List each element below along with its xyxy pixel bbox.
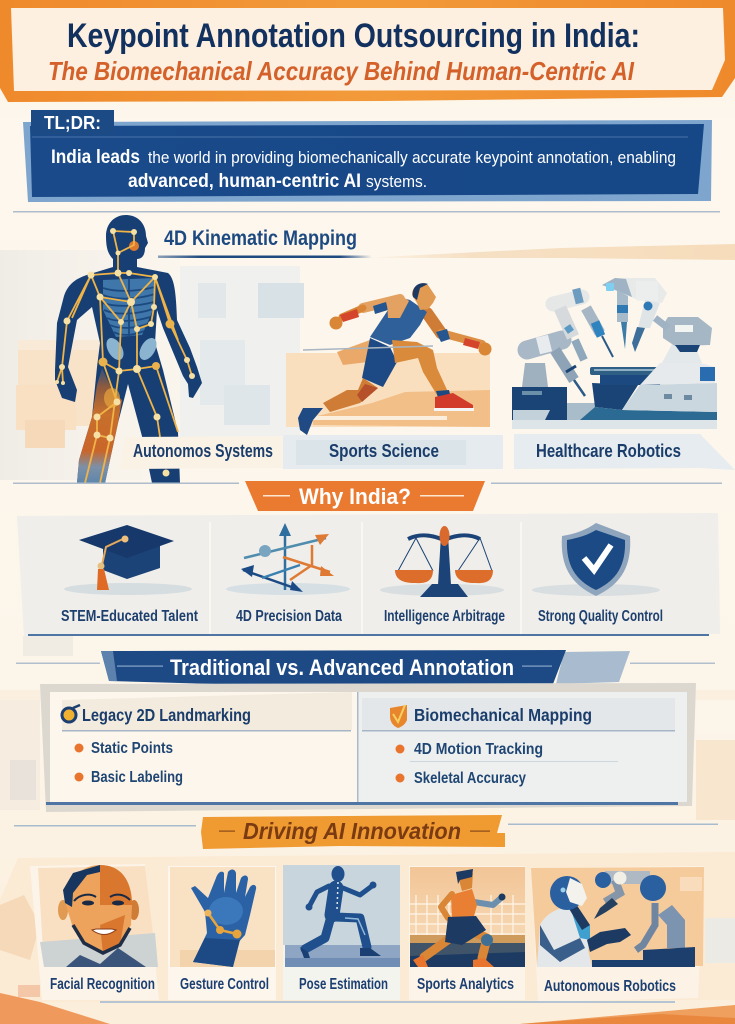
back leg [323, 378, 378, 412]
label: Strong Quality Control [538, 608, 663, 625]
label strip: Autonomos Systems [120, 436, 285, 469]
banner: Traditional vs. Advanced Annotation [101, 650, 630, 688]
head [66, 865, 132, 954]
panel: Why India [17, 513, 720, 656]
background wash blocks [0, 250, 735, 820]
back arm [342, 299, 482, 344]
summary text: the world in providing biomechanically accurate keypoint annotation, enabling [148, 148, 676, 167]
tile: gesture control [168, 866, 276, 1000]
orange lower left leg [77, 368, 122, 483]
icon: shield with check [532, 523, 660, 596]
banner: Why India?: Why India? [299, 484, 411, 509]
column: biomechanical mapping: Biomechanical Mapping [414, 705, 592, 725]
runner silhouette [305, 886, 372, 949]
robot hand [587, 928, 631, 952]
panel: comparison [40, 683, 696, 812]
panel: sports background [286, 353, 490, 427]
band behind kinematic heading [360, 244, 735, 260]
robotic arm [605, 871, 650, 884]
label strip: Healthcare Robotics: Healthcare Robotics [536, 441, 681, 461]
athlete torso [451, 889, 477, 920]
subtitle: The Biomechanical Accuracy Behind Human-Centric AI [48, 56, 635, 86]
torso [370, 298, 427, 345]
hair [63, 865, 100, 907]
TL;DR tab: TL;DR: [44, 113, 101, 133]
label: Facial Recognition [50, 976, 155, 993]
label strip: Sports Science: Sports Science [329, 441, 439, 461]
column: biomechanical mapping [362, 698, 675, 787]
label: Gesture Control [180, 976, 269, 993]
column: legacy 2D landmarking [62, 692, 352, 786]
tile: autonomous robotics [531, 866, 704, 1002]
back foot [298, 408, 323, 435]
title: Keypoint Annotation Outsourcing in India: [67, 17, 640, 55]
tower [662, 342, 702, 363]
beard [73, 925, 130, 953]
icon: shield check [390, 705, 407, 728]
bottom orange hills [0, 993, 735, 1024]
icon: 4D axes [226, 523, 350, 595]
hip blobs [103, 335, 127, 363]
summary text: systems. [366, 172, 427, 191]
label: Pose Estimation [299, 976, 388, 993]
label: Sports Analytics [417, 976, 514, 993]
figure: human skeleton [55, 215, 202, 483]
bed [600, 375, 660, 385]
banner: Driving AI Innovation: Driving AI Innovation [243, 818, 461, 844]
label strip: Healthcare Robotics [514, 434, 735, 470]
base centre [592, 383, 638, 410]
header banner [0, 0, 735, 102]
eyes [82, 900, 94, 906]
icon: graduation cap [64, 525, 192, 595]
motion line [303, 346, 433, 350]
shorts [362, 338, 397, 387]
heading: 4D Kinematic Mapping: 4D Kinematic Mapping [164, 227, 357, 250]
glove [191, 869, 256, 967]
panel: TL;DR [23, 110, 712, 202]
skeleton joints [55, 228, 195, 476]
shoulders [66, 948, 146, 967]
label: STEM-Educated Talent [61, 608, 199, 625]
robot head [550, 876, 584, 910]
label strip: Sports Science [283, 435, 503, 469]
list item: 4D Motion Tracking [414, 741, 543, 758]
skeleton lines [57, 231, 192, 483]
summary text [51, 147, 676, 192]
front arm [427, 313, 441, 333]
list item: Basic Labeling [91, 769, 183, 786]
TL;DR tab [31, 110, 114, 135]
red shoe [435, 393, 473, 410]
label: 4D Precision Data [236, 608, 342, 625]
robot body [537, 907, 592, 967]
smile [92, 929, 116, 934]
label: Intelligence Arbitrage [384, 608, 505, 625]
tile: facial recognition [30, 864, 159, 1000]
arm lower left [522, 363, 548, 387]
hip flag [337, 340, 370, 365]
arm top [602, 278, 667, 303]
column: legacy 2D landmarking: Legacy 2D Landmarking [82, 705, 251, 725]
label: Autonomous Robotics [544, 978, 676, 995]
row of labels [120, 434, 735, 470]
icon: target [62, 705, 80, 722]
tile: pose estimation [283, 865, 400, 1000]
figure: sprinter [298, 283, 492, 435]
net [410, 895, 525, 936]
tile: sports analytics [409, 866, 525, 1000]
banner: Driving AI Innovation [201, 815, 505, 849]
head [412, 284, 436, 310]
banner: Why India? [245, 481, 485, 511]
figure: surgical robot [512, 278, 717, 429]
banner: Traditional vs. Advanced Annotation: Traditional vs. Advanced Annotation [170, 655, 514, 680]
front leg [392, 340, 448, 395]
summary text: advanced, human-centric AI [128, 171, 361, 192]
label strip: Autonomos Systems: Autonomos Systems [133, 441, 273, 461]
list item: Static Points [91, 740, 173, 757]
list item: Skeletal Accuracy [414, 770, 526, 787]
floor [512, 420, 717, 429]
panel: applications background [0, 852, 735, 1002]
summary text: India leads [51, 147, 140, 168]
base left [512, 387, 567, 420]
rib cage [103, 278, 155, 337]
athlete limbs [424, 894, 501, 958]
ears [58, 900, 68, 920]
arm upper left [553, 297, 582, 304]
icon: balance scale [380, 526, 504, 597]
